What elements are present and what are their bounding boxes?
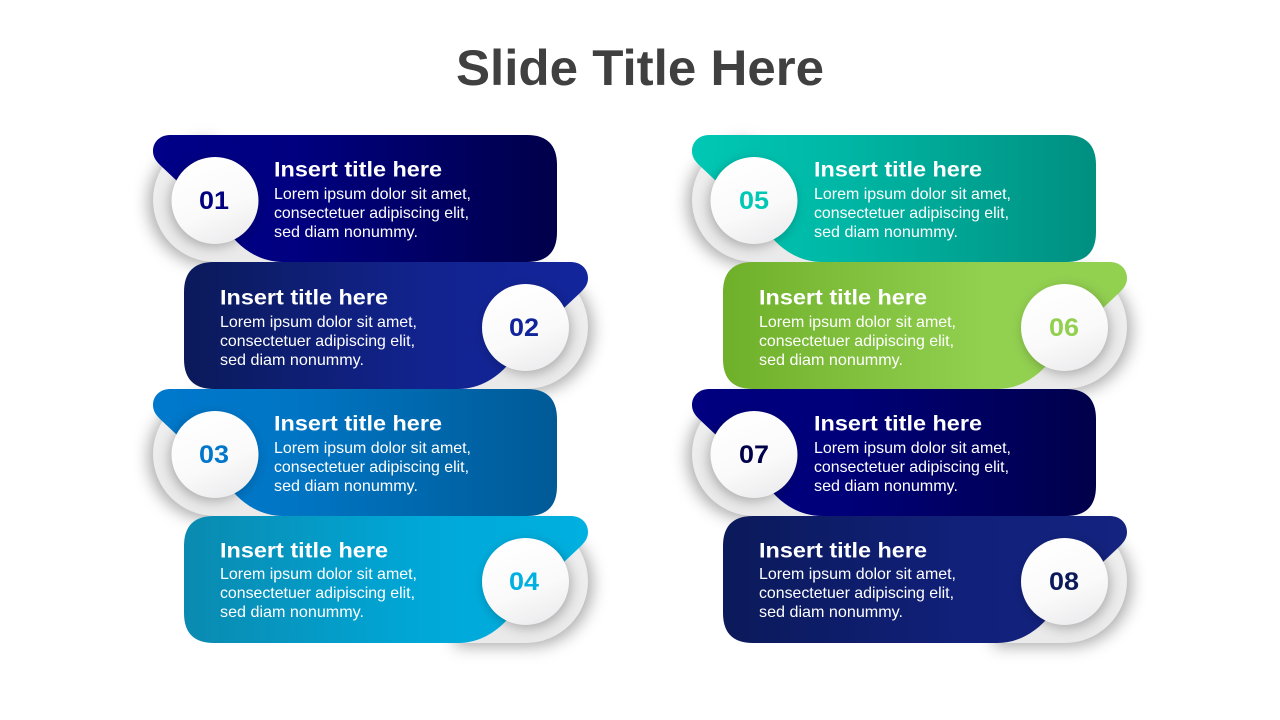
panel: item 08: sed diam nonummy.: [759, 604, 903, 621]
panel: item 08: [723, 516, 1127, 643]
panel: item 04: consectetuer adipiscing elit,: [220, 585, 415, 602]
panel: item 06: sed diam nonummy.: [759, 352, 903, 369]
panel: item 05: 05: [739, 187, 769, 215]
panel: item 02: 02: [509, 314, 539, 342]
panel: item 04: Lorem ipsum dolor sit amet,: [220, 566, 417, 583]
panel: item 04: sed diam nonummy.: [220, 604, 364, 621]
panel: item 02: Lorem ipsum dolor sit amet,: [220, 314, 417, 331]
panel: item 01: sed diam nonummy.: [274, 224, 418, 241]
panel: item 08: consectetuer adipiscing elit,: [759, 585, 954, 602]
panel: item 07: 07: [739, 441, 769, 469]
backing rings behind the number circles: [149, 138, 1131, 646]
panel: item 05: consectetuer adipiscing elit,: [814, 205, 1009, 222]
panel: item 05: sed diam nonummy.: [814, 224, 958, 241]
panel: item 05: Lorem ipsum dolor sit amet,: [814, 186, 1011, 203]
panel: item 01: consectetuer adipiscing elit,: [274, 205, 469, 222]
panel: item 03: Lorem ipsum dolor sit amet,: [274, 440, 471, 457]
panel: item 06: Insert title here: [759, 286, 927, 310]
panel: item 08: 08: [1049, 568, 1079, 596]
panel: item 06: consectetuer adipiscing elit,: [759, 333, 954, 350]
panel: item 01: [153, 135, 557, 262]
panel: item 03: 03: [199, 441, 229, 469]
panel: item 02: [184, 262, 588, 389]
panel: item 03: consectetuer adipiscing elit,: [274, 459, 469, 476]
panel: item 06: [723, 262, 1127, 389]
panel: item 04: [184, 516, 588, 643]
panel: item 06: 06: [1049, 314, 1079, 342]
panel: item 08: Insert title here: [759, 538, 927, 562]
panel: item 05: Insert title here: [814, 158, 982, 182]
panel: item 01: Lorem ipsum dolor sit amet,: [274, 186, 471, 203]
panel: item 07: sed diam nonummy.: [814, 478, 958, 495]
panel: item 01: 01: [199, 187, 229, 215]
panel: item 07: consectetuer adipiscing elit,: [814, 459, 1009, 476]
panel: item 03: sed diam nonummy.: [274, 478, 418, 495]
panel: item 01: Insert title here: [274, 158, 442, 182]
panel: item 07: Lorem ipsum dolor sit amet,: [814, 440, 1011, 457]
panel: item 02: consectetuer adipiscing elit,: [220, 333, 415, 350]
panel: item 06: Lorem ipsum dolor sit amet,: [759, 314, 956, 331]
panel: item 02: Insert title here: [220, 286, 388, 310]
panel: item 03: Insert title here: [274, 412, 442, 436]
panel: item 04: 04: [509, 568, 539, 596]
panel: item 05: [692, 135, 1096, 262]
panel: item 04: Insert title here: [220, 538, 388, 562]
panel: item 07: [692, 389, 1096, 516]
panel: item 03: [153, 389, 557, 516]
title: Slide Title Here: [456, 40, 824, 96]
panel: item 07: Insert title here: [814, 412, 982, 436]
panel: item 08: Lorem ipsum dolor sit amet,: [759, 566, 956, 583]
panel: item 02: sed diam nonummy.: [220, 352, 364, 369]
